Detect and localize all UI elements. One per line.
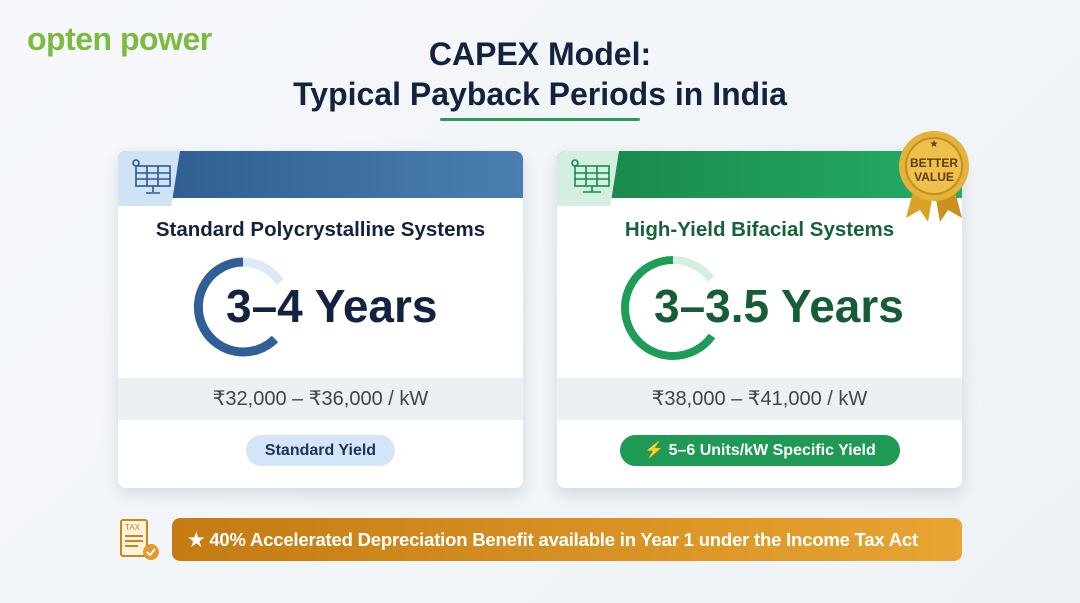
icon: solar panel	[118, 151, 180, 206]
pill	[620, 435, 900, 466]
title: Typical Payback Periods in India	[293, 76, 787, 112]
ring	[621, 256, 716, 360]
price	[118, 378, 523, 420]
payback years: 3–4 Years	[226, 280, 438, 332]
title	[293, 36, 788, 112]
price: ₹32,000 – ₹36,000 / kW	[213, 388, 428, 410]
panel: standard	[118, 151, 523, 488]
logo: opten power	[27, 21, 212, 57]
panel: bifacial	[557, 151, 962, 488]
header band	[118, 151, 523, 198]
title underline	[440, 118, 640, 121]
title: CAPEX Model:	[429, 36, 651, 72]
payback years: 3–3.5 Years	[654, 280, 904, 332]
badge: better value: VALUE	[914, 170, 954, 184]
pill: Standard Yield	[265, 442, 376, 459]
callout: depreciation	[172, 518, 962, 561]
icon: bifacial solar panel	[557, 151, 619, 206]
badge: better value	[899, 131, 969, 222]
price: ₹38,000 – ₹41,000 / kW	[652, 388, 867, 410]
header band	[557, 151, 962, 198]
pill	[246, 435, 395, 466]
ring	[194, 258, 284, 356]
card title: High-Yield Bifacial Systems	[625, 218, 894, 241]
callout: depreciation: ★ 40% Accelerated Depreciation Benefit available in Year 1 under the Income Tax Act	[188, 529, 918, 550]
icon: tax document	[120, 519, 159, 560]
badge: better value: BETTER	[910, 156, 958, 170]
card title: Standard Polycrystalline Systems	[156, 218, 485, 241]
price	[557, 378, 962, 420]
pill: ⚡ 5–6 Units/kW Specific Yield	[644, 442, 876, 459]
badge: better value: ★	[930, 139, 939, 150]
icon: tax document: TAX	[125, 523, 141, 532]
